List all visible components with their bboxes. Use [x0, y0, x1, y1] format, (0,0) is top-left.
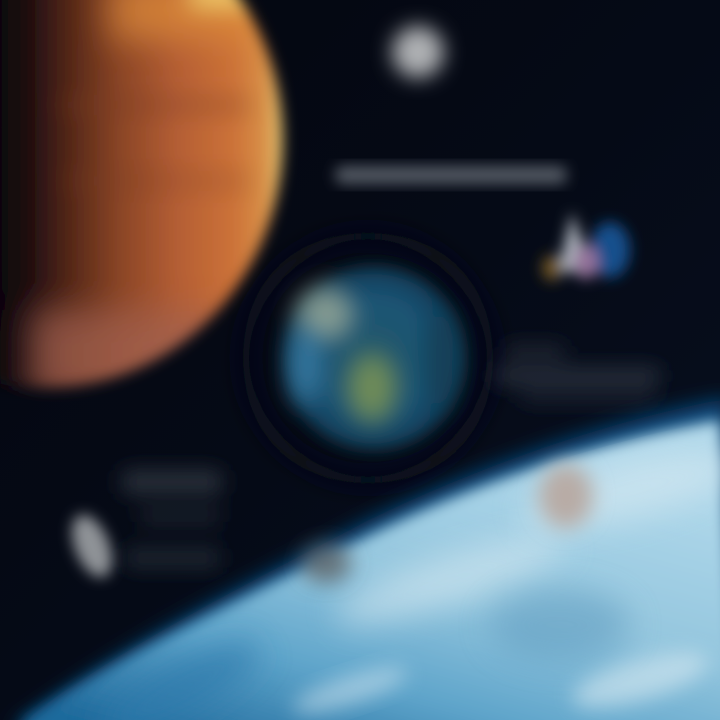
- heading: blurred title bar: [335, 166, 567, 184]
- icon: colourful logo at right: [542, 212, 630, 281]
- text block: blurred caption at right: [495, 345, 660, 402]
- icon: satellite on left of limb: [301, 543, 351, 583]
- icon: pale oval at lower left: [64, 509, 120, 583]
- ring: dark orbit around small Earth: [246, 236, 490, 480]
- text block: blurred caption at lower left: [122, 470, 222, 568]
- planet: small Earth at centre: [279, 263, 469, 453]
- moon: small pale sphere at top: [392, 26, 444, 78]
- planet: large blue Earth limb at lower right: [10, 398, 720, 720]
- icon: satellite on right of limb: [539, 464, 593, 528]
- planet: orange Mars at upper left: [0, 0, 283, 400]
